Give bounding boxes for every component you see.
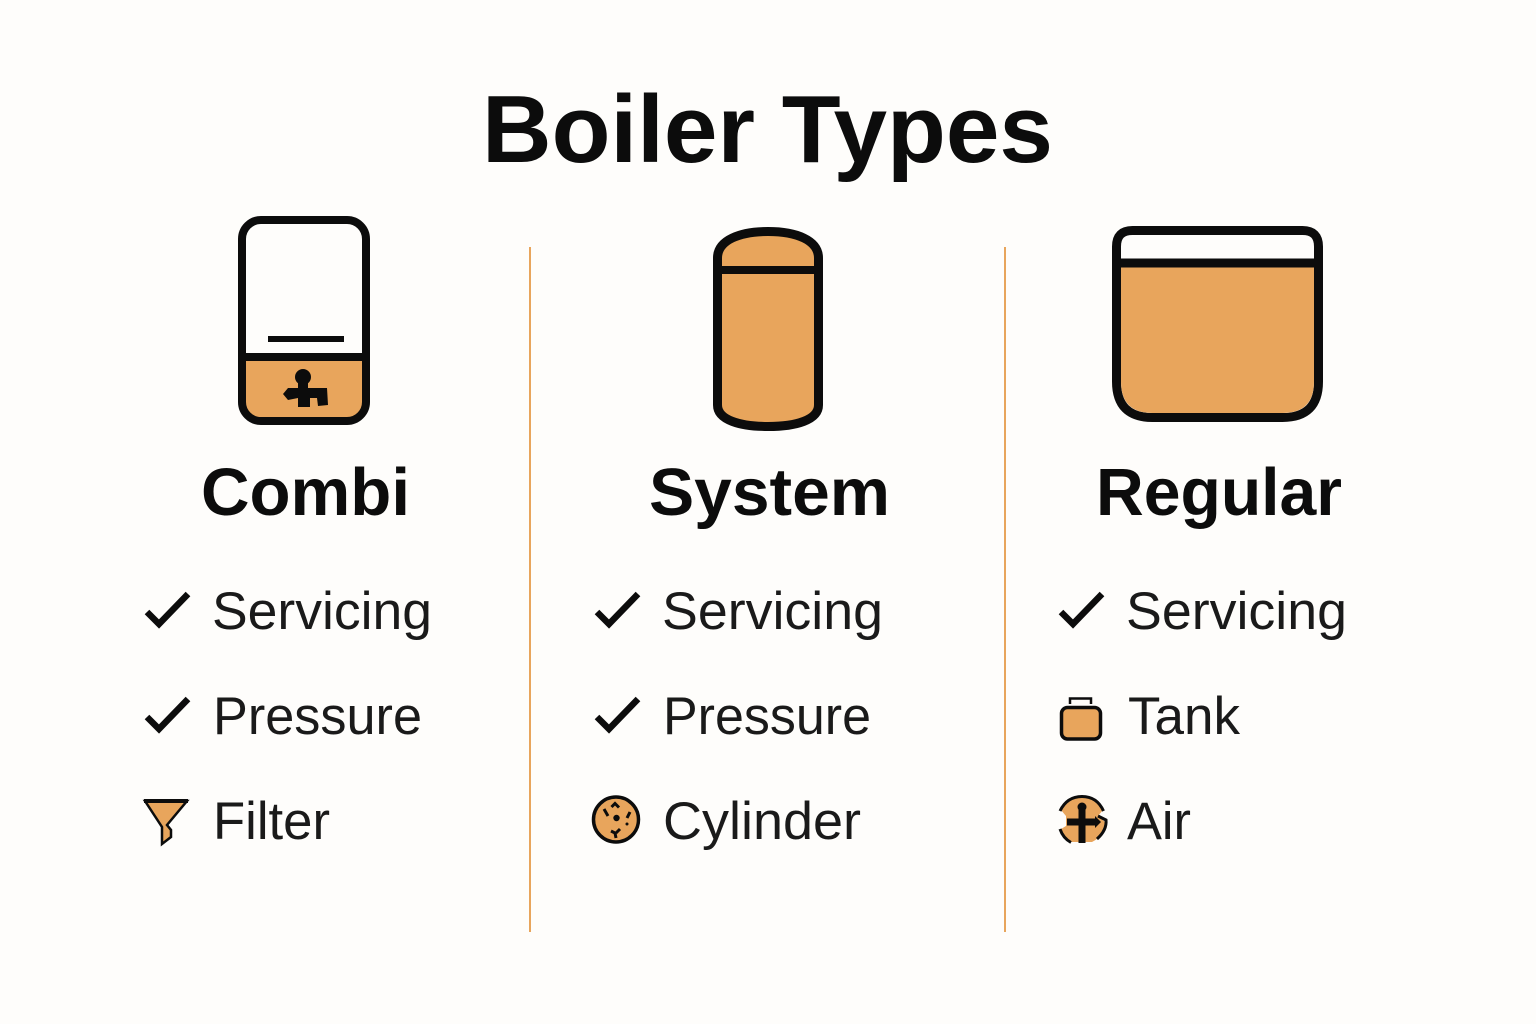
icon: system boiler (718, 232, 818, 426)
icon: filter funnel (144, 801, 188, 844)
icon: check servicing (1061, 594, 1102, 624)
label: servicing: Servicing (212, 582, 432, 641)
label: servicing: Servicing (1126, 582, 1347, 641)
icon: air (1060, 796, 1106, 843)
label: servicing: Servicing (662, 582, 883, 641)
label: pressure: Pressure (213, 687, 422, 746)
panel: combi (144, 220, 432, 851)
heading: system: System (649, 455, 890, 530)
label: cylinder: Cylinder (663, 792, 861, 851)
panel: system (594, 232, 890, 851)
icon: combi boiler (242, 220, 366, 421)
icon: regular boiler (1116, 230, 1319, 418)
label: tank: Tank (1128, 687, 1240, 746)
icon: check pressure (597, 699, 638, 729)
icon: tank (1062, 698, 1100, 739)
icon: check servicing (147, 594, 188, 624)
icon: check pressure (147, 699, 188, 729)
label: air: Air (1127, 792, 1191, 851)
label: filter: Filter (213, 792, 330, 851)
heading: regular: Regular (1096, 455, 1342, 530)
heading: combi: Combi (201, 455, 410, 530)
icon: check servicing (597, 594, 638, 624)
panel: regular (1060, 230, 1347, 851)
label: pressure: Pressure (663, 687, 871, 746)
title: Boiler Types (482, 76, 1053, 183)
icon: cylinder speckled disc (594, 797, 638, 842)
